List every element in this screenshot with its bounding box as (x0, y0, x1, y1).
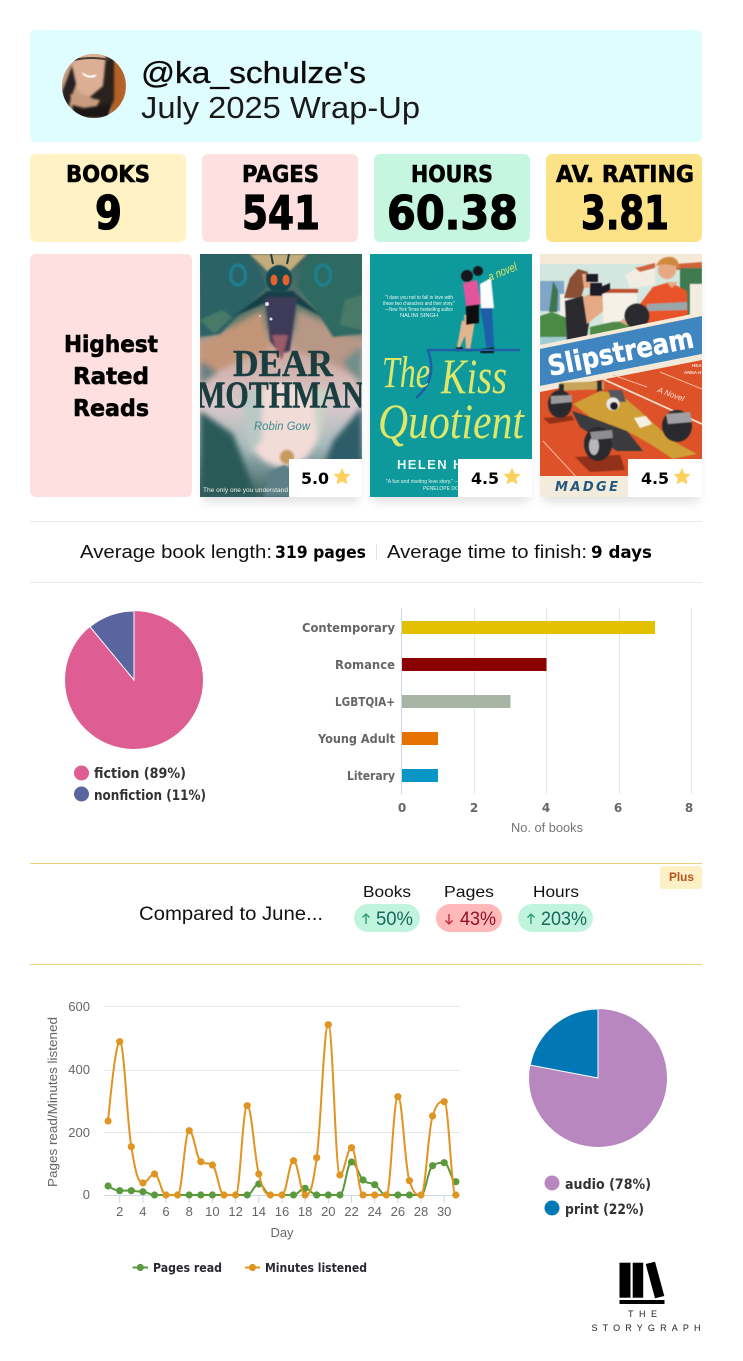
x axis labels: 22 (344, 1204, 359, 1219)
stat card: hours: HOURS (411, 162, 493, 188)
pie chart: fiction vs nonfiction (65, 611, 206, 804)
legend: print (22%) (565, 1202, 644, 1218)
rating badge: 4.5 (641, 469, 669, 488)
book cover: The Kiss Quotient: PENELOPE DOUGLAS (423, 486, 476, 492)
radical sign (416, 350, 520, 398)
stat card: average rating: AV. RATING (556, 162, 694, 188)
legend (74, 766, 206, 804)
rating badge (628, 459, 702, 497)
line chart: daily pages read and minutes listened (45, 999, 460, 1275)
pie chart: audio vs print (529, 1009, 667, 1218)
stat card: pages (202, 154, 358, 242)
line chart legend (132, 1261, 367, 1275)
series: pages read (104, 1158, 459, 1199)
illustration: camerawoman (564, 269, 610, 342)
y axis title: Pages read/Minutes listened (45, 1017, 60, 1187)
x axis labels: 24 (367, 1204, 382, 1219)
y axis labels (68, 999, 90, 1202)
legend: nonfiction (11%) (94, 788, 206, 804)
x axis labels: 20 (321, 1204, 336, 1219)
line chart legend: Pages read (153, 1261, 222, 1275)
x axis labels: 2 (116, 1204, 123, 1219)
username: @ka_schulze's (141, 55, 366, 90)
cover quote: NALINI SINGH (400, 313, 438, 319)
cover author: Robin Gow (254, 419, 311, 433)
blue banner (540, 312, 702, 349)
cover quote: —New York Times bestselling author (385, 307, 453, 313)
x axis title: Day (270, 1225, 294, 1240)
line chart legend: Minutes listened (265, 1261, 367, 1275)
legend: audio (78%) (565, 1177, 651, 1193)
series: minutes listened (104, 1021, 459, 1199)
book cover: Slipstream: HEA (692, 363, 702, 368)
book cover: Dear Mothman (197, 254, 364, 502)
stat card: books: 9 (95, 186, 122, 240)
book cover: Dear Mothman: MOTHMAN (197, 374, 364, 416)
plus badge: Plus (669, 870, 694, 884)
cover quote: "I dare you not to fall in love with (385, 295, 453, 301)
category labels: Young Adult (317, 732, 395, 746)
x axis labels: 6 (162, 1204, 170, 1219)
axis ticks: 2 (470, 801, 478, 815)
category labels: Romance (335, 658, 395, 672)
panel: highest rated reads: Highest (64, 332, 158, 358)
axis ticks (398, 801, 693, 815)
book cover: The Kiss Quotient: a novel (486, 259, 519, 284)
cover quote: these two characters and their story." (383, 301, 455, 307)
x axis ticks (120, 1195, 444, 1203)
rating badge: 5.0 (301, 469, 329, 488)
rating badge (289, 459, 362, 497)
books change (354, 884, 420, 932)
category labels: LGBTQIA+ (335, 695, 395, 709)
rating badge: 4.5 (471, 469, 499, 488)
cover author: MADGE (555, 480, 618, 495)
category labels: Contemporary (302, 621, 395, 635)
x axis labels: 4 (139, 1204, 147, 1219)
bar chart: genres (302, 608, 693, 835)
racetrack (540, 360, 702, 480)
axis ticks: 8 (685, 801, 693, 815)
book cover: Slipstream (540, 254, 702, 502)
axis title: No. of books (511, 821, 583, 835)
panel: highest rated reads: Rated (73, 364, 149, 390)
y axis labels: 600 (68, 999, 90, 1014)
x axis labels: 18 (298, 1204, 312, 1219)
hours change: 203% (541, 909, 587, 930)
book cover: The Kiss Quotient: "A fun and riveting love story." —New York Times (386, 479, 497, 485)
cover title: Slipstream (545, 322, 697, 383)
y axis labels: 200 (68, 1125, 90, 1140)
category labels: Literary (347, 769, 395, 783)
logo: The StoryGraph: THE (628, 1309, 657, 1319)
books change: Books (363, 884, 411, 901)
x axis labels: 16 (275, 1204, 289, 1219)
legend: fiction (89%) (94, 766, 186, 782)
axis ticks: 6 (614, 801, 622, 815)
stat card: pages: 541 (242, 186, 320, 240)
hours change (518, 884, 593, 932)
pages change: 43% (460, 909, 496, 930)
comparison to June (139, 884, 593, 932)
averages text row: Average book length: (80, 542, 272, 562)
subtitle: July 2025 Wrap-Up (141, 90, 420, 125)
stat card: average rating (546, 154, 702, 242)
logo: The StoryGraph (592, 1262, 700, 1333)
x axis labels: 28 (414, 1204, 428, 1219)
x axis labels: 12 (228, 1204, 243, 1219)
pages change: Pages (444, 884, 494, 901)
stat card: average rating: 3.81 (581, 186, 669, 240)
cover title: DEAR (233, 343, 334, 385)
legend (544, 1176, 651, 1218)
illustration: racing driver (620, 257, 688, 333)
cover author: HELEN HOANG (397, 457, 507, 472)
cover quote (383, 295, 455, 319)
averages text row (80, 542, 652, 563)
bars (402, 621, 655, 782)
book cover: The Kiss Quotient (370, 254, 532, 502)
pages change (436, 884, 502, 932)
cover title: Kiss (440, 348, 507, 404)
book cover: Slipstream: ANNA H (684, 370, 701, 375)
y axis labels: 0 (83, 1187, 90, 1202)
x axis labels: 10 (205, 1204, 220, 1219)
couple illustration (456, 266, 494, 353)
cover title (380, 356, 525, 446)
stat card: books: BOOKS (66, 162, 150, 188)
category labels (302, 621, 395, 783)
books change: 50% (376, 909, 413, 930)
averages text row: Average time to finish: (387, 542, 587, 562)
stat card: pages: PAGES (242, 162, 319, 188)
rating badge (458, 459, 532, 497)
stat card: hours: 60.38 (387, 186, 518, 240)
x axis labels: 14 (252, 1204, 266, 1219)
cover title: Quotient (378, 393, 525, 449)
axis ticks: 0 (398, 801, 406, 815)
avatar photo (62, 50, 126, 118)
stat card: books (30, 154, 186, 242)
x axis labels: 30 (437, 1204, 451, 1219)
book cover: Dear Mothman: The only one you understand (203, 487, 288, 494)
plus badge (660, 866, 702, 889)
y axis labels: 400 (68, 1062, 90, 1077)
header panel (30, 30, 702, 142)
stat card: hours (374, 154, 530, 242)
race car (543, 381, 697, 472)
panel: highest rated reads: Reads (73, 396, 149, 422)
cover title: The (382, 348, 430, 397)
x axis labels: 26 (391, 1204, 405, 1219)
axis ticks: 4 (542, 801, 550, 815)
comparison to June: Compared to June... (139, 904, 323, 925)
panel: highest rated reads (30, 254, 192, 497)
logo: The StoryGraph: STORYGRAPH (592, 1323, 700, 1333)
x axis labels (116, 1204, 451, 1219)
averages text row: 319 pages (275, 543, 366, 563)
book cover: Slipstream: A Novel (655, 385, 686, 403)
x axis labels: 8 (186, 1204, 193, 1219)
averages text row: 9 days (591, 543, 652, 563)
hours change: Hours (533, 884, 579, 901)
